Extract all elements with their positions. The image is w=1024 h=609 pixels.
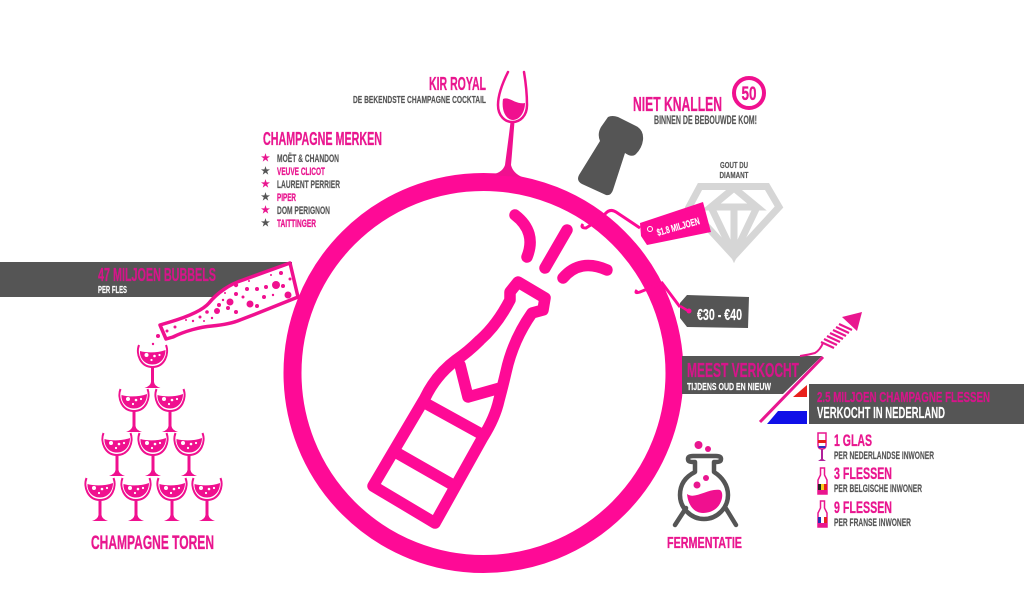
list: champagne merken: ★: [261, 192, 270, 203]
list: champagne merken: [261, 129, 382, 230]
stat: 3 flessen: [818, 465, 922, 495]
icon: cork: [578, 116, 643, 195]
icon: speed limit 50: 50: [742, 84, 756, 105]
list: champagne merken: ★: [261, 166, 270, 177]
heading: niet knallen: [633, 93, 757, 127]
heading: kir royal: DE BEKENDSTE CHAMPAGNE COCKTAIL: [353, 95, 486, 106]
stat: 9 flessen: 9 FLESSEN: [834, 499, 892, 517]
band: meest verkocht: MEEST VERKOCHT: [687, 360, 799, 382]
icon: fermentation flask: [675, 441, 736, 525]
list: champagne merken: PIPER: [277, 192, 296, 204]
list: champagne merken: LAURENT PERRIER: [277, 179, 340, 191]
list: champagne merken: ★: [261, 218, 270, 229]
heading: niet knallen: NIET KNALLEN: [633, 93, 722, 116]
list: champagne merken: ★: [261, 179, 270, 190]
champagne tower: [85, 345, 222, 521]
list: champagne merken: VEUVE CLICOT: [277, 166, 325, 178]
label: fermentatie: FERMENTATIE: [667, 535, 742, 552]
band: 47 miljoen bubbels: [0, 262, 292, 297]
list: champagne merken: ★: [261, 205, 270, 216]
icon: central champagne bottle: [373, 215, 607, 523]
icon: pouring bottle with bubbles: [152, 263, 298, 345]
icon: dutch flag triangle: [767, 385, 807, 424]
heading: niet knallen: BINNEN DE BEBOUWDE KOM!: [654, 115, 757, 127]
list: champagne merken: ★: [261, 153, 270, 164]
list: champagne merken: TAITTINGER: [277, 218, 316, 230]
stat: 1 glas: PER NEDERLANDSE INWONER: [834, 450, 934, 462]
list: champagne merken: CHAMPAGNE MERKEN: [263, 129, 382, 149]
tag: price 30 to 40 euro: [636, 283, 749, 328]
band: 47 miljoen bubbels: PER FLES: [98, 284, 127, 296]
band: 2.5 miljoen flessen: VERKOCHT IN NEDERLAND: [817, 405, 945, 422]
stat: 3 flessen: 3 FLESSEN: [834, 465, 892, 483]
tag: price 30 to 40 euro: €30 - €40: [697, 307, 742, 324]
icon: firework rocket: [760, 312, 862, 422]
stat: 3 flessen: PER BELGISCHE INWONER: [834, 483, 922, 495]
main circle: [292, 182, 674, 564]
label: gout du diamant: [720, 160, 749, 180]
icon: speed limit 50: [734, 78, 764, 108]
icon: kir royal glass: [488, 72, 527, 177]
tag: price 1.8 miljoen: $1.8 MILJOEN: [656, 216, 701, 239]
icon: diamond: [689, 186, 779, 256]
heading: kir royal: KIR ROYAL: [429, 74, 486, 94]
heading: kir royal: [353, 74, 486, 106]
band: meest verkocht: TIJDENS OUD EN NIEUW: [687, 381, 771, 393]
label: gout du diamant: GOUT DU: [720, 160, 748, 170]
stat: 1 glas: [818, 432, 934, 462]
stat: 9 flessen: [818, 499, 911, 529]
list: champagne merken: MOËT & CHANDON: [277, 152, 339, 165]
list: champagne merken: DOM PERIGNON: [277, 205, 330, 217]
label: gout du diamant: DIAMANT: [720, 170, 749, 180]
tag: price 1.8 miljoen: [582, 202, 711, 245]
stat: 9 flessen: PER FRANSE INWONER: [834, 517, 911, 529]
band: 2.5 miljoen flessen: [809, 384, 1024, 424]
band: meest verkocht: [682, 356, 822, 394]
label: champagne toren: CHAMPAGNE TOREN: [91, 532, 214, 554]
band: 47 miljoen bubbels: 47 MILJOEN BUBBELS: [98, 265, 216, 285]
stat: 1 glas: 1 GLAS: [834, 432, 872, 450]
